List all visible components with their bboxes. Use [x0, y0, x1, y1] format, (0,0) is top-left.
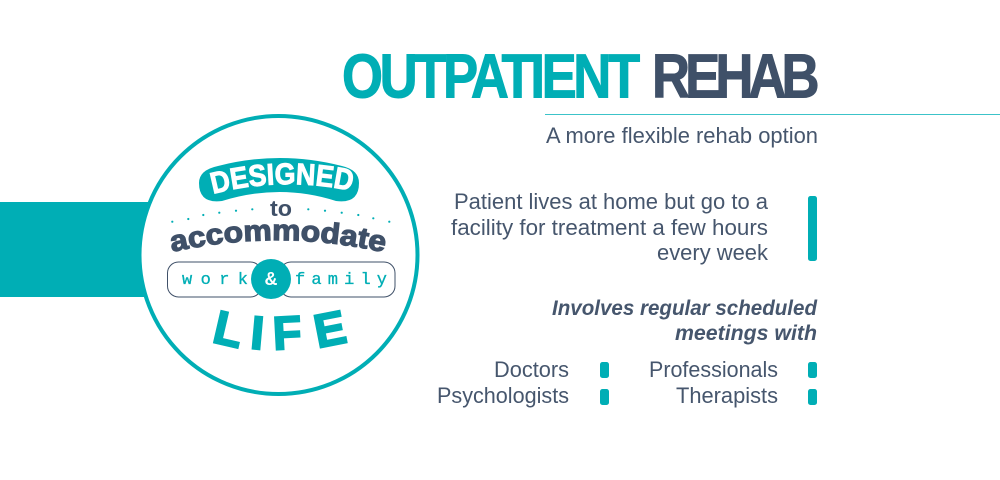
description text [451, 189, 769, 265]
pill: family: family [295, 271, 387, 290]
list item: doctors [494, 357, 609, 382]
list item: therapists: Therapists [676, 383, 778, 408]
meetings heading [552, 297, 818, 345]
title: REHAB [652, 43, 817, 112]
meetings heading: meetings with [675, 322, 817, 345]
description marker [808, 196, 817, 261]
word: accommodate: accommodate [170, 222, 386, 252]
pill: work [168, 262, 262, 297]
list item: psychologists: Psychologists [437, 383, 569, 408]
ampersand circle: & [264, 269, 278, 289]
list item: doctors: Doctors [494, 357, 569, 382]
title: OUTPATIENT [342, 43, 640, 112]
word: life [209, 300, 350, 360]
word: life: E [309, 300, 350, 358]
description text: every week [657, 240, 769, 265]
word: life: I [249, 306, 266, 360]
banner: designed: DESIGNED [210, 162, 354, 194]
meetings heading: Involves regular scheduled [552, 297, 818, 320]
title [342, 43, 817, 112]
list item: professionals: Professionals [649, 357, 778, 382]
pill: family [280, 262, 395, 297]
description text: facility for treatment a few hours [451, 215, 768, 240]
ampersand circle [251, 259, 291, 299]
word: to: to [270, 196, 292, 221]
word: life: L [209, 300, 249, 358]
pill: work: work [182, 271, 248, 290]
title rule [545, 114, 1000, 115]
subtitle: A more flexible rehab option [546, 123, 818, 148]
dotted arc [171, 208, 390, 223]
badge [142, 114, 420, 396]
badge circle [140, 116, 418, 394]
teal band [0, 202, 150, 297]
description text: Patient lives at home but go to a [454, 189, 769, 214]
word: life: F [271, 305, 303, 360]
